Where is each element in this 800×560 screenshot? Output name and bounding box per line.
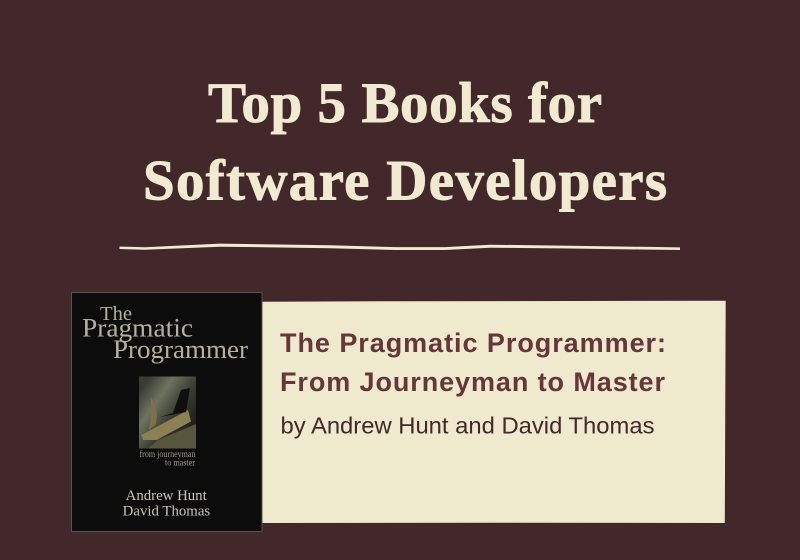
book cover xyxy=(72,292,262,532)
book title: From Journeyman to Master xyxy=(280,367,665,397)
book author: by Andrew Hunt and David Thomas xyxy=(280,412,654,438)
cover authors: Andrew Hunt xyxy=(126,488,207,504)
title: Software Developers xyxy=(143,150,667,212)
book title xyxy=(280,328,666,397)
panel: book details xyxy=(260,301,726,523)
title: Top 5 Books for xyxy=(208,72,602,135)
cover subtitle: to master xyxy=(165,458,195,468)
cover subtitle xyxy=(140,449,196,468)
title xyxy=(143,72,667,212)
cover authors: David Thomas xyxy=(123,504,211,520)
book title: The Pragmatic Programmer: xyxy=(280,328,666,358)
hand-drawn underline xyxy=(120,244,680,250)
cover photo: wood plane xyxy=(139,376,196,448)
cover title: Programmer xyxy=(113,335,248,364)
cover title: The xyxy=(100,303,132,325)
cover subtitle: from journeyman xyxy=(140,449,196,459)
card background xyxy=(260,301,726,523)
cover title: Pragmatic xyxy=(82,314,193,342)
cover background xyxy=(72,292,262,532)
cover title xyxy=(82,303,248,364)
cover authors xyxy=(123,488,211,520)
